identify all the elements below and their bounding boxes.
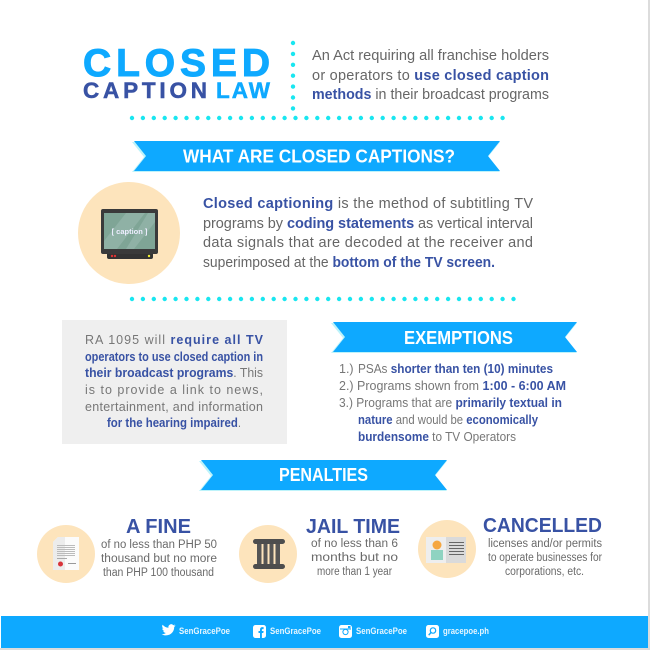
definition paragraph: Closed captioning is the method of subtitling TV [203,196,533,212]
penalty: a fine [101,516,217,579]
penalty: cancelled: corporations, etc. [505,566,584,578]
penalty: a fine: than PHP 100 thousand [103,567,214,579]
ribbon heading: penalties: PENALTIES [279,465,368,485]
handle: website: gracepoe.ph [443,626,489,637]
penalty: cancelled: CANCELLED [483,515,602,537]
exemptions list: burdensome to TV Operators [358,430,516,444]
icon: website search [426,625,439,638]
penalty: a fine: thousand but no more [101,553,217,565]
panel: RA 1095 summary: their broadcast programs. This [85,366,263,380]
penalty: cancelled: licenses and/or permits [488,538,602,550]
penalty: a fine: A FINE [126,516,191,538]
icon: television with caption [78,182,180,284]
definition paragraph: superimposed at the bottom of the TV screen. [203,255,495,271]
icon: television with caption: [ caption ] [112,227,148,236]
icon: instagram [339,625,352,638]
panel: RA 1095 summary: entertainment, and information [85,400,263,414]
handle: facebook: SenGracePoe [270,626,321,637]
ribbon heading: exemptions [331,322,577,353]
intro text [312,48,549,103]
definition paragraph [203,196,533,271]
exemptions list: nature and would be economically [358,413,538,427]
penalty: a fine: of no less than PHP 50 [101,539,217,551]
intro text: methods in their broadcast programs [312,87,549,103]
penalty: jail time: more than 1 year [317,566,392,578]
intro text: or operators to use closed caption [312,68,549,84]
ribbon heading: penalties [199,460,447,491]
handle: twitter: SenGracePoe [179,626,230,637]
icon: fine document [37,525,95,583]
panel: RA 1095 summary: is to provide a link to news, [85,383,263,397]
ribbon heading: exemptions: EXEMPTIONS [404,328,513,348]
icon: permit card [418,520,476,578]
panel: RA 1095 summary [62,320,287,444]
panel: RA 1095 summary: for the hearing impaired. [107,416,241,430]
exemptions list: 2.) Programs shown from 1:00 - 6:00 AM [339,379,566,393]
footer bar [1,616,648,648]
ribbon heading: what are closed captions [132,141,500,172]
intro text: An Act requiring all franchise holders [312,48,549,64]
exemptions list: PSAs shorter than ten (10) minutes [358,362,553,376]
panel: RA 1095 summary: RA 1095 will require all TV [85,333,264,347]
icon: twitter [162,624,176,635]
exemptions list: 1.) [339,362,354,376]
penalty: jail time: months but no [311,552,398,564]
ribbon heading: what are closed captions: WHAT ARE CLOSED CAPTIONS? [183,146,455,166]
icon: facebook [253,625,266,638]
exemptions list [339,362,566,444]
icon: jail bars [239,525,297,583]
definition paragraph: programs by coding statements as vertical interval [203,216,533,232]
title: CLOSED [83,42,270,85]
title: LAW [216,78,271,103]
panel: RA 1095 summary: operators to use closed caption in [85,350,263,364]
penalty: cancelled: to operate businesses for [488,552,602,564]
definition paragraph: data signals that are decoded at the receiver and [203,235,533,251]
penalty: jail time: JAIL TIME [306,516,400,538]
penalty: cancelled [483,515,602,578]
title: CAPTION [83,78,207,103]
handle: instagram: SenGracePoe [356,626,407,637]
penalty: jail time: of no less than 6 [311,538,398,550]
penalty: jail time [306,516,400,578]
exemptions list: 3.) Programs that are primarily textual in [339,396,562,410]
